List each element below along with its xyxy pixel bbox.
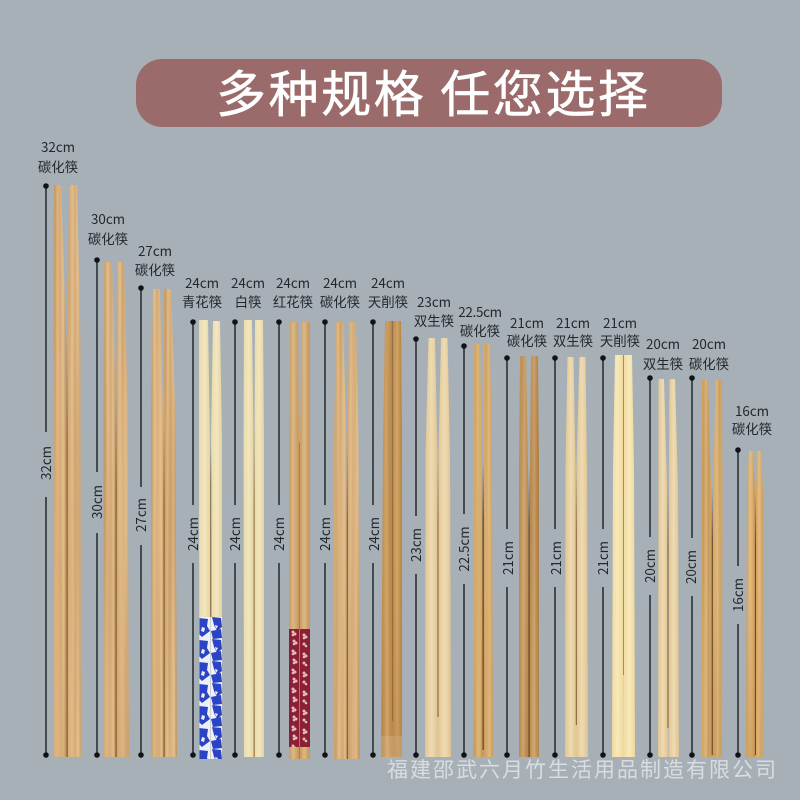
label: 30cm 碳化筷	[88, 208, 128, 248]
spec: 21cm carbonized	[497, 312, 547, 758]
label: 24cm 碳化筷	[320, 272, 360, 311]
title banner: 多种规格 任您选择	[216, 55, 648, 127]
dimension line: 24cm tapered	[363, 319, 383, 758]
spec: 24cm tapered	[363, 272, 408, 758]
chopstick pair: 21cm twin	[565, 357, 588, 757]
dimension line: 16cm	[727, 447, 747, 758]
label: 30cm 碳化筷: 碳化筷	[88, 228, 128, 248]
dimension line: 24cm carbonized: 24cm	[314, 517, 334, 551]
label: 16cm 碳化筷: 碳化筷	[732, 418, 772, 438]
label: 20cm 双生筷	[643, 333, 683, 373]
label: 24cm 天削筷: 天削筷	[368, 291, 408, 311]
dimension line: 16cm: 16cm	[727, 578, 747, 612]
dimension line: 20cm carbonized	[680, 375, 700, 758]
spec: 20cm twin	[639, 333, 683, 758]
label: 23cm 双生筷: 23cm	[417, 291, 451, 311]
label: 20cm 双生筷: 双生筷	[643, 353, 683, 373]
spec: 20cm carbonized	[680, 333, 729, 758]
chopstick pair: 32cm	[54, 185, 81, 757]
label: 22.5cm 碳化筷	[458, 301, 502, 340]
dimension line: 23cm	[405, 336, 425, 758]
label: 24cm 天削筷	[368, 272, 408, 311]
label: 20cm 碳化筷	[689, 333, 729, 373]
chopstick pair: 21cm tapered	[612, 355, 635, 757]
label: 32cm 碳化筷: 碳化筷	[38, 156, 78, 176]
label: 21cm 双生筷: 21cm	[556, 312, 590, 332]
label: 21cm 碳化筷: 碳化筷	[507, 330, 547, 350]
dimension line: 21cm carbonized: 21cm	[497, 541, 517, 575]
label: 24cm 碳化筷: 碳化筷	[320, 291, 360, 311]
label: 24cm 红花筷: 24cm	[276, 272, 310, 292]
dimension line: 27cm: 27cm	[130, 498, 150, 532]
spec: 21cm tapered	[592, 312, 640, 758]
label: 32cm 碳化筷: 32cm	[41, 136, 75, 156]
chopstick pair: 16cm	[746, 451, 763, 757]
chopstick pair: 24cm carbonized	[334, 322, 360, 759]
label: 21cm 碳化筷: 21cm	[510, 312, 544, 332]
dimension line: 24cm red	[268, 319, 288, 758]
label: 21cm 碳化筷	[507, 312, 547, 350]
chopstick pair: 22.5cm	[473, 344, 493, 757]
label: 24cm 天削筷: 24cm	[371, 272, 405, 292]
dimension line: 23cm: 23cm	[405, 528, 425, 562]
label: 24cm 红花筷	[273, 272, 313, 311]
dimension line: 20cm carbonized: 20cm	[680, 550, 700, 584]
label: 21cm 双生筷	[553, 312, 593, 350]
label: 21cm 天削筷	[600, 312, 640, 350]
dimension line: 24cm carbonized	[314, 319, 334, 758]
dimension line: 22.5cm	[453, 343, 473, 758]
label: 27cm 碳化筷: 碳化筷	[135, 259, 175, 279]
spec: 24cm carbonized	[314, 272, 360, 759]
chopstick pair: 30cm	[104, 262, 129, 757]
dimension line: 24cm tapered: 24cm	[363, 517, 383, 551]
label: 16cm 碳化筷	[732, 400, 772, 438]
dimension line: 24cm red: 24cm	[268, 517, 288, 551]
dimension line: 24cm blue: 24cm	[182, 517, 202, 551]
label: 20cm 双生筷: 20cm	[646, 333, 680, 353]
dimension line: 24cm white: 24cm	[224, 517, 244, 551]
spec: 32cm carbonized	[35, 136, 81, 758]
label: 24cm 青花筷: 青花筷	[182, 291, 222, 311]
spec: 16cm carbonized	[727, 400, 772, 758]
chopstick pair: 24cm tapered	[381, 321, 402, 758]
dimension line: 24cm white	[224, 319, 244, 758]
spec: 24cm red-flower	[268, 272, 313, 759]
dimension line: 21cm tapered: 21cm	[592, 541, 612, 575]
chopstick pair: 23cm	[425, 338, 451, 757]
spec: 24cm blue-and-white	[182, 272, 222, 759]
label: 22.5cm 碳化筷: 22.5cm	[458, 301, 502, 321]
dimension line: 21cm carbonized	[497, 355, 517, 758]
dimension line: 21cm tapered	[592, 355, 612, 758]
label: 21cm 双生筷: 双生筷	[553, 330, 593, 350]
dimension line: 21cm twin	[545, 355, 565, 758]
spec: 22.5cm carbonized	[453, 301, 502, 758]
label: 20cm 碳化筷: 碳化筷	[689, 353, 729, 373]
label: 24cm 白筷: 24cm	[231, 272, 265, 292]
label: 23cm 双生筷	[414, 291, 454, 330]
spec: 30cm carbonized	[86, 208, 129, 758]
label: 30cm 碳化筷: 30cm	[91, 208, 125, 228]
dimension line: 21cm twin: 21cm	[545, 541, 565, 575]
label: 23cm 双生筷: 双生筷	[414, 310, 454, 330]
dimension line: 30cm	[86, 257, 106, 758]
label: 27cm 碳化筷	[135, 240, 175, 279]
label: 24cm 青花筷: 24cm	[185, 272, 219, 292]
label: 21cm 天削筷: 天削筷	[600, 330, 640, 350]
dimension line: 24cm blue	[182, 319, 202, 758]
chopstick pair: 24cm blue	[199, 320, 222, 759]
label: 24cm 红花筷: 红花筷	[273, 291, 313, 311]
dimension line: 20cm twin: 20cm	[639, 549, 659, 583]
chopstick pair: 24cm red	[289, 322, 310, 759]
label: 24cm 白筷	[231, 272, 265, 311]
chopstick pair: 24cm white	[244, 320, 264, 757]
spec: 27cm carbonized	[130, 240, 177, 758]
label: 24cm 白筷: 白筷	[235, 291, 261, 311]
chopstick pair: 27cm	[151, 289, 177, 757]
dimension line: 30cm: 30cm	[86, 485, 106, 519]
dimension line: 22.5cm: 22.5cm	[453, 526, 473, 572]
chopstick pair: 21cm carbonized	[519, 356, 539, 757]
dimension line: 32cm: 32cm	[35, 446, 55, 480]
label: 22.5cm 碳化筷: 碳化筷	[460, 320, 500, 340]
spec: 23cm twin	[405, 291, 454, 758]
label: 24cm 碳化筷: 24cm	[323, 272, 357, 292]
chopstick pair: 20cm twin	[658, 379, 679, 757]
label: 32cm 碳化筷	[38, 136, 78, 176]
label: 27cm 碳化筷: 27cm	[138, 240, 172, 260]
chopstick pair: 20cm carbonized	[702, 380, 722, 757]
watermark: company name: 福建邵武六月竹生活用品制造有限公司	[387, 754, 776, 784]
spec: 24cm white	[224, 272, 265, 758]
spec: 21cm twin	[545, 312, 593, 758]
dimension line: 32cm	[35, 183, 55, 758]
label: 21cm 天削筷: 21cm	[603, 312, 637, 332]
label: 20cm 碳化筷: 20cm	[692, 333, 726, 353]
label: 24cm 青花筷	[182, 272, 222, 311]
dimension line: 20cm twin	[639, 375, 659, 758]
dimension line: 27cm	[130, 285, 150, 758]
label: 16cm 碳化筷: 16cm	[735, 400, 769, 420]
